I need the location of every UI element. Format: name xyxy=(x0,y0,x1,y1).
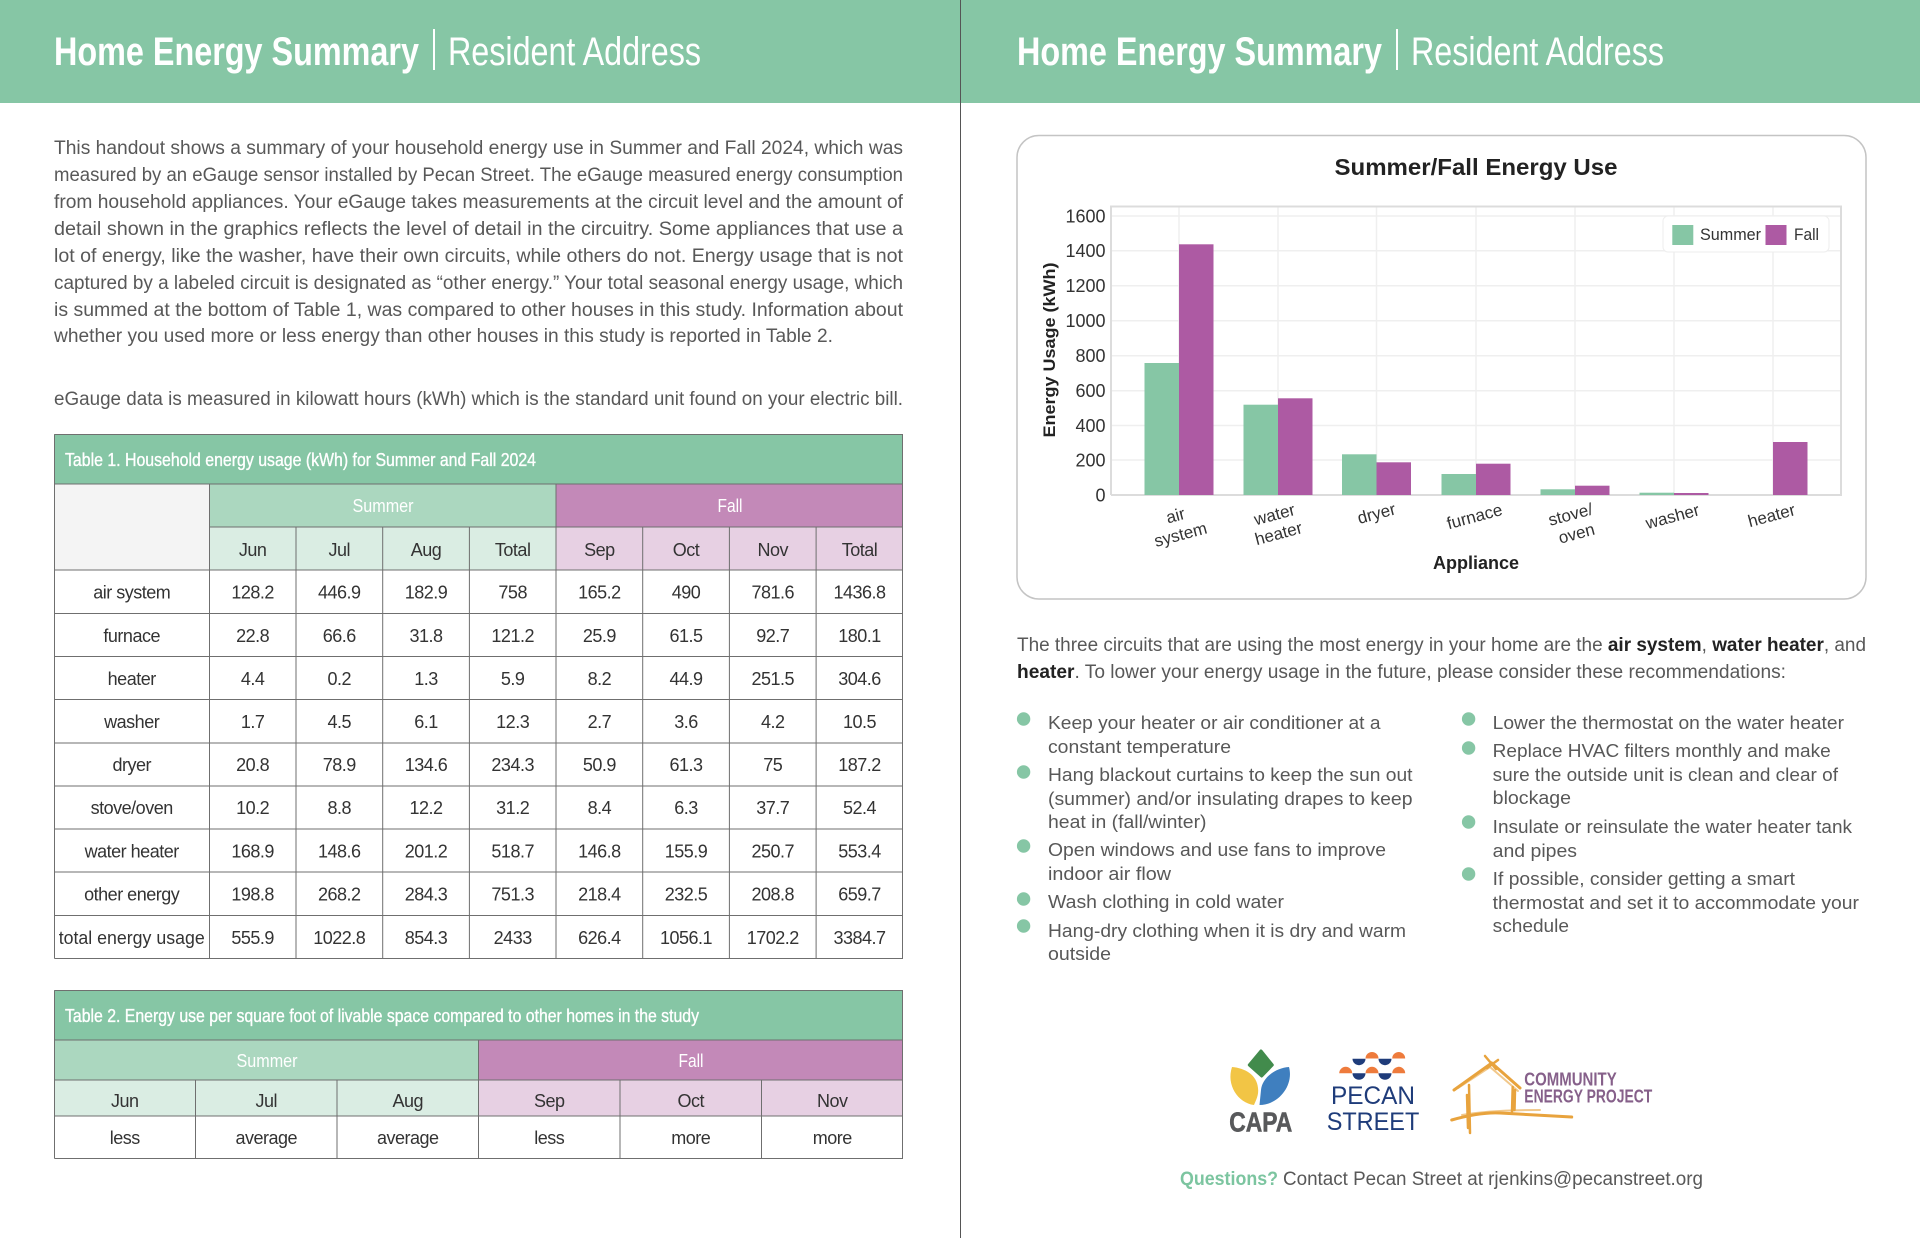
row: washer xyxy=(103,712,876,732)
logo: Community Energy Project: COMMUNITY xyxy=(1524,1070,1617,1090)
contact line: Questions? xyxy=(1180,1169,1278,1190)
bullet: constant temperature xyxy=(1017,712,1381,757)
bullet: insulate tank: and pipes xyxy=(1493,840,1577,861)
row: other energy: 268.2 xyxy=(318,884,361,904)
row: stove/oven: 52.4 xyxy=(843,798,876,818)
row: furnace xyxy=(103,626,881,646)
bullet: hang dry xyxy=(1017,919,1406,964)
row: water heater: 250.7 xyxy=(752,842,795,862)
bullet: hang dry: outside xyxy=(1048,943,1111,964)
row: other energy: other energy xyxy=(84,884,180,904)
bullet: windows and fans: indoor air flow xyxy=(1048,863,1172,884)
row: dryer: 61.3 xyxy=(669,755,703,775)
row: total energy usage: 555.9 xyxy=(231,928,274,948)
x axis labels: furnace xyxy=(1445,500,1504,533)
row: air system: 165.2 xyxy=(578,582,621,602)
row: heater: 304.6 xyxy=(838,669,881,689)
left header banner: Resident Address xyxy=(448,30,701,74)
left header banner: Home Energy Summary xyxy=(54,30,420,74)
logo: CAPA xyxy=(1229,1051,1292,1138)
bullet: hang dry: Hang-dry clothing when it is dry and warm xyxy=(1048,920,1406,941)
table 2 values: average xyxy=(377,1128,439,1148)
top circuits paragraph: heater. To lower your energy usage in the future, please consider these recommendations: xyxy=(1017,662,1786,683)
bullet: windows and fans xyxy=(1017,839,1386,884)
table 2 season headers: Fall xyxy=(678,1051,704,1071)
right header banner: Home Energy Summary xyxy=(1017,30,1383,74)
row: dryer: 187.2 xyxy=(838,755,881,775)
row: air system: 1436.8 xyxy=(833,582,886,602)
page divider xyxy=(960,0,962,1238)
bullet: water heater thermostat: Lower the thermostat on the water heater xyxy=(1493,712,1844,733)
chart grid lines xyxy=(1112,206,1841,495)
x axis labels: air xyxy=(1164,504,1187,527)
bullet: HVAC filters xyxy=(1462,740,1839,808)
row: total energy usage xyxy=(59,928,886,948)
right header banner xyxy=(961,0,1920,103)
y axis ticks: 1400 xyxy=(1065,241,1106,261)
row: air system: 182.9 xyxy=(405,582,448,602)
bullet: insulate tank: Insulate or reinsulate the water heater tank xyxy=(1493,816,1853,837)
row: heater: heater xyxy=(108,669,156,689)
x axis labels: water xyxy=(1251,500,1297,530)
row: total energy usage: 3384.7 xyxy=(833,928,886,948)
table 1 grid xyxy=(54,434,903,958)
logo: Community Energy Project: ENERGY PROJECT xyxy=(1524,1087,1652,1107)
row: water heater: 148.6 xyxy=(318,842,361,862)
logo: Pecan Street: STREET xyxy=(1327,1108,1419,1136)
row: stove/oven xyxy=(91,798,876,818)
y axis label: Energy Usage (kWh) xyxy=(1040,262,1059,438)
row: water heater: 155.9 xyxy=(665,842,708,862)
row: heater: 5.9 xyxy=(501,669,525,689)
table 2 values: average xyxy=(235,1128,298,1148)
bullet: curtains: Hang blackout curtains to keep the sun out xyxy=(1048,764,1412,785)
bullet: smart thermostat: thermostat and set it to accommodate your xyxy=(1493,892,1859,913)
bullet: curtains: heat in (fall/winter) xyxy=(1048,811,1206,832)
row: dryer: 234.3 xyxy=(491,755,534,775)
row: heater: 44.9 xyxy=(669,669,703,689)
row: dryer: 50.9 xyxy=(583,755,616,775)
intro paragraph: from household appliances. Your eGauge takes measurements at the circuit level and the amount of xyxy=(54,192,904,213)
row: furnace: 31.8 xyxy=(409,626,443,646)
table 1 title xyxy=(54,434,903,484)
row: total energy usage: 1022.8 xyxy=(313,928,366,948)
row: dryer xyxy=(112,755,881,775)
contact line: Contact Pecan Street at rjenkins@pecanstreet.org xyxy=(1283,1169,1703,1190)
table 2 month headers: Aug xyxy=(392,1091,423,1111)
table 1 month headers: Nov xyxy=(758,540,789,560)
table 1 month headers: Jun xyxy=(239,540,266,560)
table 2 month headers: Sep xyxy=(534,1091,565,1111)
row: heater: 251.5 xyxy=(752,669,795,689)
row: furnace: 121.2 xyxy=(491,626,534,646)
table 2 values xyxy=(110,1128,852,1148)
table 1 month headers: Oct xyxy=(673,540,700,560)
row: stove/oven: 8.4 xyxy=(588,798,612,818)
table 2 values: less xyxy=(534,1128,565,1148)
bullet: constant temperature: Keep your heater or air conditioner at a xyxy=(1048,712,1381,733)
table 1 title: Table 1. Household energy usage (kWh) for Summer and Fall 2024 xyxy=(65,450,536,470)
chart legend: Summer xyxy=(1700,225,1761,244)
row: heater: 4.4 xyxy=(241,669,265,689)
row: air system: 490 xyxy=(672,582,701,602)
row: heater xyxy=(108,669,881,689)
table 1 month headers: Total xyxy=(842,540,877,560)
units note: eGauge data is measured in kilowatt hours (kWh) which is the standard unit found on your electric bill. xyxy=(54,389,903,410)
row: other energy: 659.7 xyxy=(838,884,881,904)
row: furnace: 66.6 xyxy=(323,626,356,646)
bullet: constant temperature: constant temperature xyxy=(1048,736,1231,757)
row: other energy: 208.8 xyxy=(752,884,795,904)
table 1 xyxy=(54,434,903,958)
row: dryer: 78.9 xyxy=(323,755,356,775)
bullet: curtains xyxy=(1017,764,1412,832)
row: stove/oven: 8.8 xyxy=(328,798,352,818)
intro paragraph: detail shown in the graphics reflects the level of detail in the circuitry. Some appliances that use a xyxy=(54,219,903,240)
x axis title: Appliance xyxy=(1433,553,1519,573)
row: air system: 128.2 xyxy=(231,582,274,602)
summer bars xyxy=(1144,363,1674,495)
intro paragraph: lot of energy, like the washer, have their own circuits, while others do not. Energy usage that is not xyxy=(54,246,904,267)
row: other energy: 284.3 xyxy=(405,884,448,904)
table 1 month headers: Sep xyxy=(584,540,615,560)
intro paragraph: whether you used more or less energy than other houses in this study is reported in Table 2. xyxy=(53,326,833,347)
x axis labels xyxy=(1152,499,1798,551)
table 2 xyxy=(54,990,903,1158)
y axis ticks: 1000 xyxy=(1065,311,1106,331)
table 2 month headers: Jul xyxy=(255,1091,277,1111)
intro paragraph xyxy=(53,138,904,347)
y axis ticks: 200 xyxy=(1075,450,1106,470)
row: dryer: 20.8 xyxy=(236,755,270,775)
y axis ticks: 600 xyxy=(1075,381,1106,401)
row: water heater: 201.2 xyxy=(405,842,448,862)
row: total energy usage: 626.4 xyxy=(578,928,621,948)
row: stove/oven: stove/oven xyxy=(91,798,173,818)
table 1 season headers: Summer xyxy=(352,496,414,516)
chart legend: Fall xyxy=(1794,225,1819,244)
row: washer: 3.6 xyxy=(674,712,698,732)
row: heater: 8.2 xyxy=(588,669,612,689)
row: total energy usage: 2433 xyxy=(494,928,532,948)
y axis ticks: 800 xyxy=(1075,346,1106,366)
row: stove/oven: 10.2 xyxy=(236,798,270,818)
right header banner: Resident Address xyxy=(1411,30,1664,74)
y axis ticks: 1200 xyxy=(1065,276,1106,296)
row: dryer: dryer xyxy=(112,755,151,775)
row: total energy usage: 1702.2 xyxy=(747,928,799,948)
y axis ticks: 1600 xyxy=(1065,206,1106,226)
row: water heater: 518.7 xyxy=(491,842,534,862)
table 2 values: more xyxy=(813,1128,852,1148)
chart panel: Summer/Fall energy use xyxy=(1017,136,1866,599)
row: stove/oven: 12.2 xyxy=(409,798,443,818)
chart title: Summer/Fall Energy Use xyxy=(1334,154,1618,180)
row: furnace: 22.8 xyxy=(236,626,270,646)
row: furnace: 61.5 xyxy=(669,626,703,646)
y axis ticks xyxy=(1065,206,1106,506)
plot frame xyxy=(1111,206,1841,495)
row: washer: 4.5 xyxy=(328,712,352,732)
x axis labels: washer xyxy=(1643,500,1702,533)
x axis labels: dryer xyxy=(1355,499,1398,528)
row: washer: 1.7 xyxy=(241,712,265,732)
bullet: curtains: (summer) and/or insulating drapes to keep xyxy=(1048,788,1412,809)
table 2 season headers xyxy=(54,1040,903,1080)
row: other energy xyxy=(84,884,881,904)
row: other energy: 198.8 xyxy=(231,884,274,904)
row: total energy usage: 1056.1 xyxy=(660,928,713,948)
row: washer: 6.1 xyxy=(414,712,438,732)
table 2 month headers xyxy=(54,1080,903,1116)
bullet: insulate tank xyxy=(1462,815,1853,861)
row: washer: 2.7 xyxy=(588,712,612,732)
table 2 title xyxy=(54,990,903,1040)
row: washer: 12.3 xyxy=(496,712,530,732)
row: water heater: 168.9 xyxy=(231,842,274,862)
recommendations: left column xyxy=(1017,712,1412,964)
bullet: smart thermostat: schedule xyxy=(1493,915,1569,936)
row: dryer: 134.6 xyxy=(405,755,448,775)
table 2 values: more xyxy=(671,1128,711,1148)
x axis labels: heater xyxy=(1746,500,1798,531)
row: stove/oven: 37.7 xyxy=(756,798,790,818)
logo: Community Energy Project xyxy=(1452,1056,1652,1133)
table 2 values: less xyxy=(110,1128,140,1148)
intro paragraph: captured by a labeled circuit is designated as “other energy.” Your total seasonal energy usage, which xyxy=(54,273,903,294)
y axis ticks: 400 xyxy=(1075,416,1106,436)
row: air system: air system xyxy=(93,582,170,602)
row: total energy usage: 854.3 xyxy=(405,928,448,948)
table 2 month headers: Oct xyxy=(677,1091,704,1111)
row: furnace: furnace xyxy=(103,626,160,646)
row: furnace: 92.7 xyxy=(756,626,790,646)
intro paragraph: This handout shows a summary of your household energy use in Summer and Fall 2024, which was xyxy=(54,138,903,159)
intro paragraph: is summed at the bottom of Table 1, was compared to other houses in this study. Information about xyxy=(54,300,904,321)
bullet: HVAC filters: sure the outside unit is clean and clear of xyxy=(1493,764,1839,785)
row: total energy usage: total energy usage xyxy=(59,928,205,948)
table 1 month headers: Total xyxy=(495,540,530,560)
logo: Pecan Street: PECAN xyxy=(1331,1082,1415,1110)
x axis labels: stove/ xyxy=(1546,500,1595,530)
row: other energy: 751.3 xyxy=(491,884,534,904)
row: water heater: 553.4 xyxy=(838,842,881,862)
bullet: smart thermostat xyxy=(1462,867,1859,936)
bullet: HVAC filters: Replace HVAC filters monthly and make xyxy=(1493,740,1831,761)
table 1 month headers: Aug xyxy=(411,540,441,560)
fall bars xyxy=(1179,244,1808,495)
table 2 month headers: Jun xyxy=(111,1091,139,1111)
row: air system xyxy=(93,582,886,602)
row: other energy: 218.4 xyxy=(578,884,621,904)
table 2 grid xyxy=(54,990,903,1158)
row: stove/oven: 6.3 xyxy=(674,798,698,818)
bullet: windows and fans: Open windows and use fans to improve xyxy=(1048,839,1386,860)
table 2 title: Table 2. Energy use per square foot of livable space compared to other homes in the study xyxy=(65,1006,699,1026)
table 2 month headers: Nov xyxy=(817,1091,848,1111)
row: dryer: 75 xyxy=(763,755,783,775)
top circuits paragraph: The three circuits that are using the most energy in your home are the air system, water heater, and xyxy=(1017,635,1866,656)
recommendations: right column xyxy=(1462,712,1859,936)
y axis ticks: 0 xyxy=(1095,486,1106,506)
row: air system: 446.9 xyxy=(318,582,361,602)
left header banner xyxy=(0,0,960,103)
x axis labels: oven xyxy=(1556,520,1597,548)
row: water heater: 146.8 xyxy=(578,842,621,862)
bullet: HVAC filters: blockage xyxy=(1493,787,1571,808)
table 1 month headers xyxy=(210,527,903,570)
row: washer: 10.5 xyxy=(843,712,876,732)
bullet: cold water: Wash clothing in cold water xyxy=(1048,891,1284,912)
x axis labels: system xyxy=(1152,519,1209,551)
row: water heater xyxy=(84,842,881,862)
table 1 season headers xyxy=(54,484,903,570)
row: furnace: 180.1 xyxy=(838,626,881,646)
row: heater: 1.3 xyxy=(414,669,438,689)
row: air system: 758 xyxy=(498,582,527,602)
top circuits paragraph xyxy=(1017,635,1866,683)
chart legend xyxy=(1663,216,1829,252)
table 2 season headers: Summer xyxy=(236,1051,298,1071)
logo: Pecan Street xyxy=(1327,1052,1419,1136)
logo: CAPA: CAPA xyxy=(1229,1107,1292,1138)
table 1 season headers: Fall xyxy=(718,496,742,516)
row: heater: 0.2 xyxy=(328,669,352,689)
row: furnace: 25.9 xyxy=(583,626,616,646)
bullet: smart thermostat: If possible, consider getting a smart xyxy=(1493,868,1795,889)
table 1 month headers: Jul xyxy=(329,540,350,560)
row: water heater: water heater xyxy=(84,842,179,862)
row: air system: 781.6 xyxy=(752,582,795,602)
row: washer: 4.2 xyxy=(761,712,785,732)
intro paragraph: measured by an eGauge sensor installed by Pecan Street. The eGauge measured energy consumption xyxy=(54,165,903,186)
row: washer: washer xyxy=(103,712,160,732)
row: stove/oven: 31.2 xyxy=(496,798,530,818)
x axis labels: heater xyxy=(1253,518,1305,549)
row: other energy: 232.5 xyxy=(665,884,708,904)
